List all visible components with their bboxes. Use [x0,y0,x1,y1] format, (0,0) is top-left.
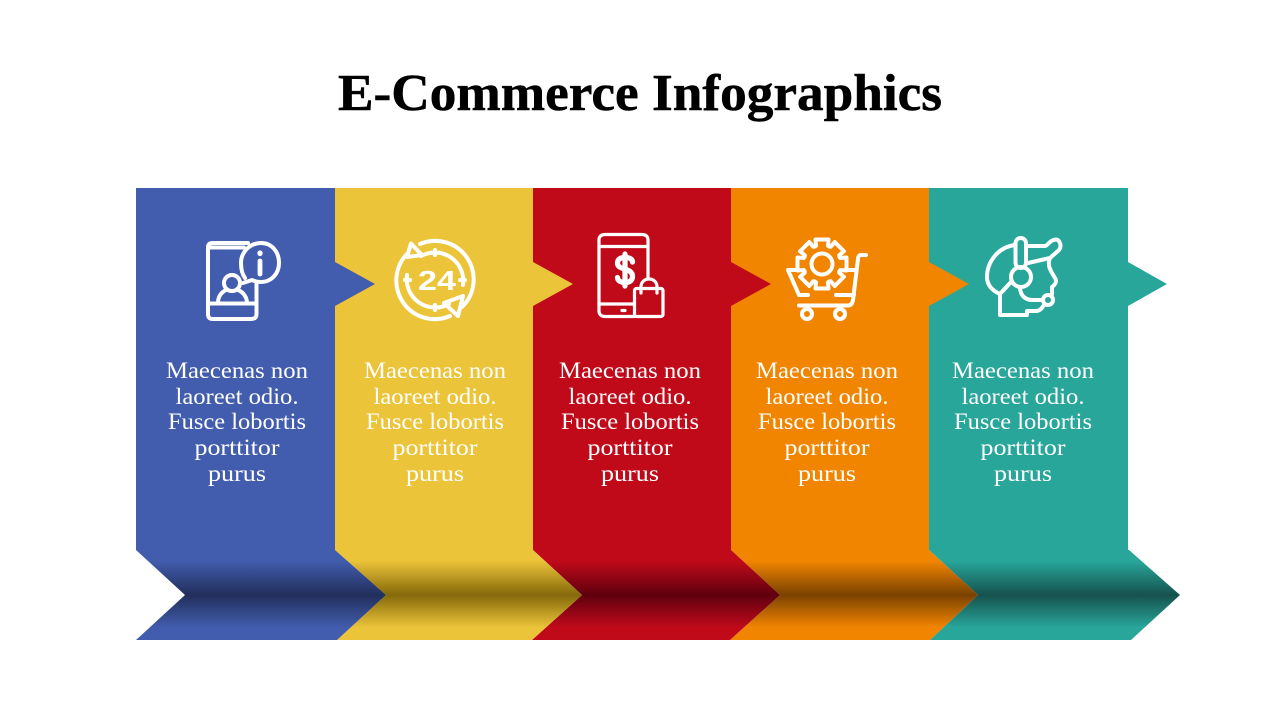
arrow banner: yellow [335,188,573,550]
text: step 3 description: laoreet odio. [568,384,692,409]
arrow banner: orange [731,188,969,550]
text: step 3 description: Maecenas non [559,358,702,383]
text: step 5 description: Fusce lobortis [954,409,1092,434]
text: step 4 description: Fusce lobortis [758,409,896,434]
icon: 24 hour clock with arrows: 24 [418,265,457,296]
text: step 1 description [166,358,309,486]
text: step 5 description: laoreet odio. [962,384,1084,409]
text: step 5 description [952,358,1095,486]
chevron: red base [532,550,780,640]
chevron: yellow base [335,550,582,640]
text: step 1 description: porttitor [194,435,280,460]
text: step 4 description: Maecenas non [756,358,899,383]
panel: step 2 yellow [335,188,582,640]
icon: phone with user and info bubble [208,243,279,319]
text: step 3 description: Fusce lobortis [561,409,699,434]
text: step 2 description: laoreet odio. [374,384,496,409]
text: step 2 description: porttitor [392,435,478,460]
text: step 3 description: porttitor [588,435,673,460]
panel: step 5 teal [929,188,1180,640]
text: step 2 description [364,358,507,486]
arrow banner: blue [136,188,375,550]
text: step 2 description: Maecenas non [364,358,507,383]
text: step 4 description: porttitor [784,435,870,460]
title: E-Commerce Infographics [338,65,942,122]
arrow banner: teal [929,188,1167,550]
text: step 5 description: Maecenas non [952,358,1095,383]
icon: support agent headset [987,238,1060,315]
text: step 3 description [559,358,702,486]
text: step 1 description: Maecenas non [166,358,309,383]
text: step 2 description: purus [406,461,464,486]
icon: phone with dollar and shopping bag [599,234,663,316]
arrow banner: red [533,188,771,550]
icon: 24 hour clock with arrows [396,241,474,319]
text: step 3 description: purus [601,461,659,486]
text: step 4 description: laoreet odio. [766,384,888,409]
text: step 1 description: purus [208,461,266,486]
panel: step 1 blue [136,188,386,640]
chevron: blue base [136,550,386,640]
text: step 4 description [756,358,899,486]
chevron: orange base [730,550,978,640]
text: step 2 description: Fusce lobortis [366,409,504,434]
chevron: teal base [929,550,1180,640]
text: step 1 description: laoreet odio. [176,384,298,409]
text: step 1 description: Fusce lobortis [168,409,306,434]
text: step 5 description: porttitor [980,435,1066,460]
icon: shopping cart with gear [788,240,866,319]
panel: step 4 orange [730,188,978,640]
text: step 5 description: purus [994,461,1052,486]
text: step 4 description: purus [798,461,856,486]
panel: step 3 red [532,188,780,640]
